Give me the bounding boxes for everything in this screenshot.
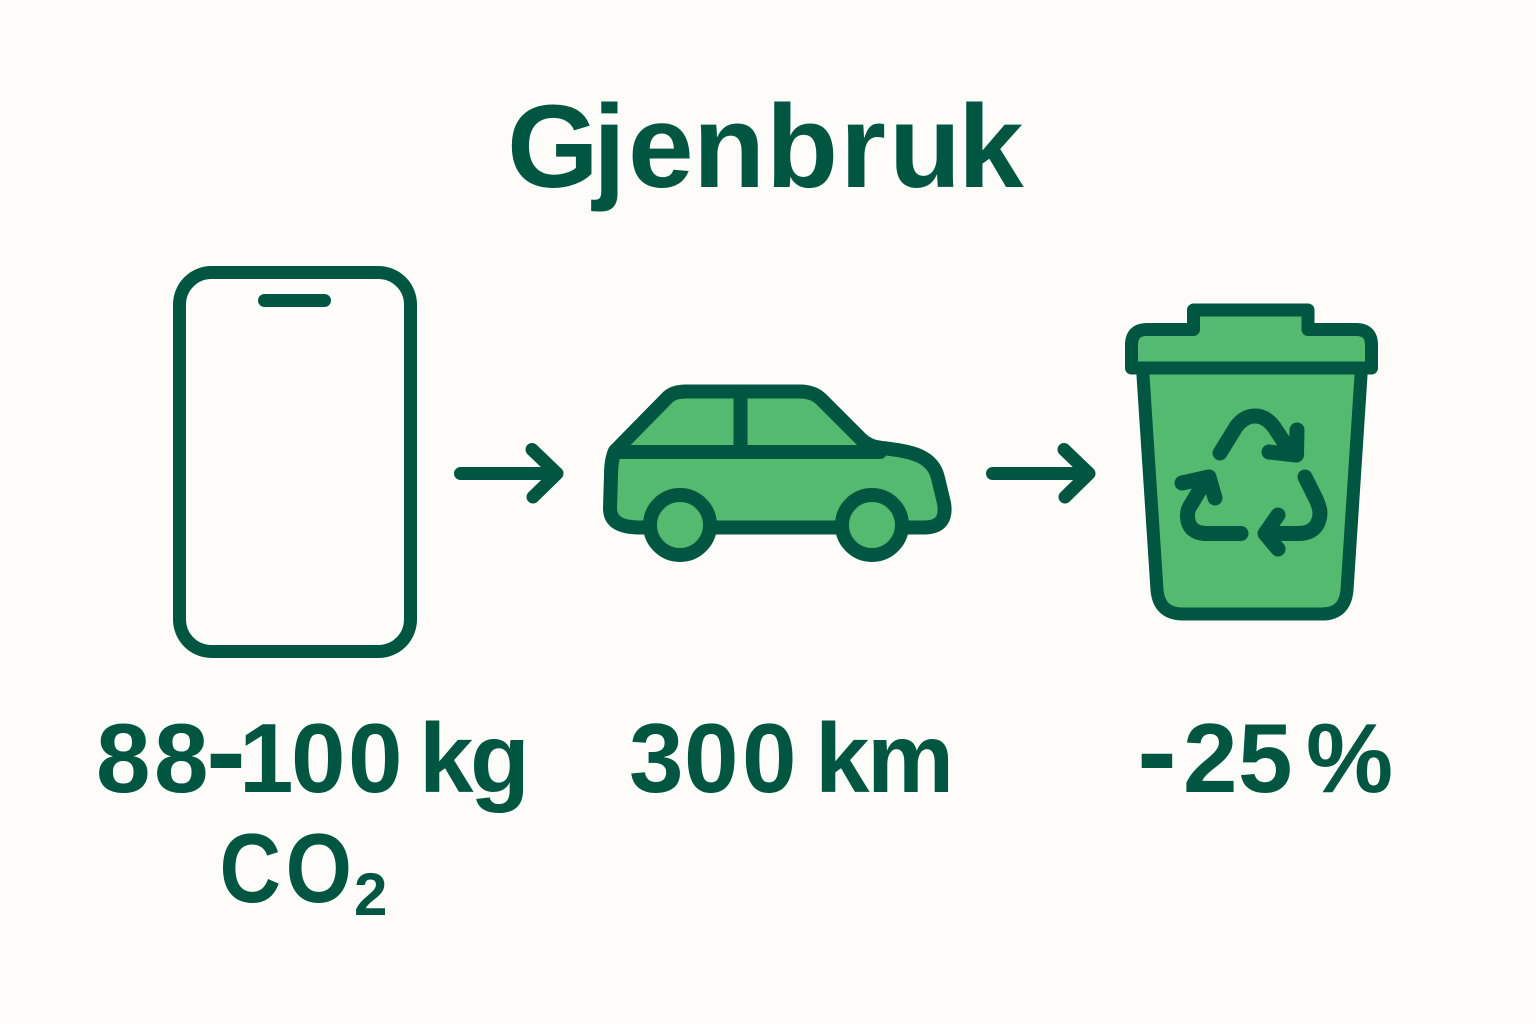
icon: recycling bin — [1132, 310, 1372, 614]
title: Gjenbruk — [507, 81, 1024, 213]
label: reduction percent: 25 % — [1183, 703, 1393, 813]
bin lid — [1132, 310, 1372, 368]
arrow: phone to car — [460, 450, 557, 497]
arrow: car to bin — [992, 450, 1089, 497]
label: CO2 from phone: 88 — [96, 703, 209, 813]
label: CO2 from phone: CO — [220, 815, 352, 923]
icon: phone — [180, 272, 410, 652]
label: CO2 from phone — [96, 684, 530, 928]
icon: car — [610, 392, 945, 555]
label: distance by car: 300 km — [629, 703, 954, 813]
bin body — [1142, 368, 1362, 614]
label: reduction percent: - — [1137, 684, 1177, 818]
label: CO2 from phone: 2 — [354, 861, 387, 928]
label: CO2 from phone: - — [206, 684, 246, 818]
label: CO2 from phone: 100 kg — [239, 703, 530, 813]
recycling symbol — [1182, 416, 1320, 549]
